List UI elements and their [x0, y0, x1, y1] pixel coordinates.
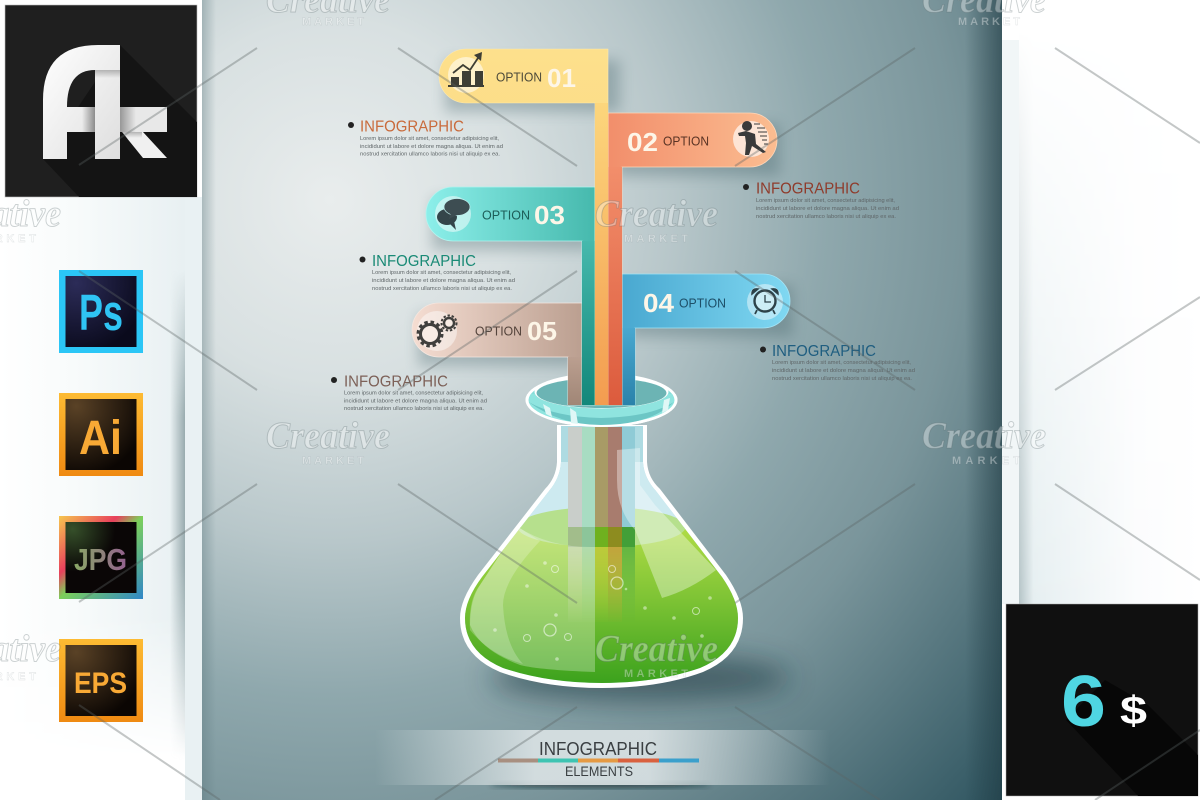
banner shadow — [490, 782, 710, 788]
option 02 label — [627, 121, 769, 157]
text block 04: incididunt ut labore et dolore magna aliqua. Ut enim ad — [772, 368, 915, 374]
stems in liquid — [568, 527, 635, 547]
format icon: Photoshop: Ps — [79, 284, 123, 341]
watermark logos: Creative — [266, 415, 390, 457]
watermark logos: MARKET — [624, 668, 688, 680]
option 02 label: OPTION — [663, 134, 709, 148]
glass highlight: right — [617, 448, 716, 598]
text block 02: nostrud xercitation ullamco laboris nisi ut aliquip ex ea. — [756, 214, 896, 220]
option 04 label — [643, 284, 783, 320]
banner subtitle: ELEMENTS — [565, 763, 633, 779]
AK logo mark — [43, 45, 167, 159]
watermark logos: MARKET — [624, 233, 688, 245]
option 01 ribbon — [439, 49, 608, 405]
banner colour bar — [498, 758, 699, 762]
option 01 label: 01 — [547, 63, 576, 93]
text block 02 — [743, 180, 899, 220]
logo box — [5, 5, 197, 197]
icon: alarm clock — [747, 284, 783, 320]
text block 04: nostrud xercitation ullamco laboris nisi ut aliquip ex ea. — [772, 376, 912, 382]
watermark logos: Creative — [595, 193, 718, 235]
glass outline — [460, 425, 743, 688]
icon: gears — [417, 311, 457, 351]
text block 05: INFOGRAPHIC — [344, 374, 448, 390]
format icon: EPS — [59, 639, 143, 722]
icon: rising chart — [448, 52, 484, 93]
glass highlight: left band — [470, 527, 540, 664]
stems fading in liquid — [568, 547, 635, 622]
watermark logos: MARKET — [958, 16, 1020, 28]
icon: runner — [733, 121, 769, 157]
text block 02: incididunt ut labore et dolore magna aliqua. Ut enim ad — [756, 206, 899, 212]
format icon: EPS: EPS — [74, 667, 127, 700]
text block 02: Lorem ipsum dolor sit amet, consectetur adipisicing elit, — [756, 198, 896, 204]
text block 05: Lorem ipsum dolor sit amet, consectetur adipisicing elit, — [344, 390, 484, 396]
option 03 label: OPTION — [482, 208, 530, 222]
watermark logos: Creative — [595, 628, 718, 670]
option 02 label: 02 — [627, 127, 658, 157]
flask body — [450, 425, 760, 690]
liquid — [465, 527, 738, 683]
text block 05: nostrud xercitation ullamco laboris nisi ut aliquip ex ea. — [344, 406, 484, 412]
bottom banner — [375, 730, 830, 788]
text block 01 — [348, 118, 503, 158]
price box — [1006, 604, 1198, 796]
text block 05: incididunt ut labore et dolore magna aliqua. Ut enim ad — [344, 398, 487, 404]
shoulder tint — [529, 462, 676, 518]
text block 01: INFOGRAPHIC — [360, 118, 464, 136]
option 05 label: OPTION — [475, 324, 522, 338]
right side panel — [1002, 40, 1116, 604]
option 01 label: OPTION — [496, 70, 542, 84]
tab shadows — [418, 60, 793, 366]
text block 03: INFOGRAPHIC — [372, 253, 476, 270]
stems in neck — [568, 427, 635, 527]
option 04 label: OPTION — [679, 296, 726, 310]
text block 04 — [760, 343, 915, 382]
option 03 ribbon — [426, 187, 595, 405]
text block 01: Lorem ipsum dolor sit amet, consectetur adipisicing elit, — [360, 136, 500, 142]
liquid surface — [518, 507, 686, 547]
flask rim back — [526, 373, 678, 427]
text block 03: Lorem ipsum dolor sit amet, consectetur adipisicing elit, — [372, 270, 512, 276]
watermark logos: MARKET — [302, 455, 364, 467]
flask drop shadow — [490, 654, 790, 702]
format icon: JPG — [59, 516, 143, 599]
glass interior — [465, 426, 738, 683]
left side panel — [82, 197, 202, 800]
small bubbles — [493, 561, 712, 661]
text block 03: incididunt ut labore et dolore magna aliqua. Ut enim ad — [372, 278, 515, 284]
text block 04: INFOGRAPHIC — [772, 343, 876, 360]
option 02 ribbon — [608, 113, 777, 405]
option 03 label — [435, 196, 565, 232]
text block 03 — [360, 253, 515, 292]
long shadow of logo — [43, 45, 197, 197]
option 05 ribbon — [412, 303, 582, 405]
price shadow — [1066, 680, 1198, 796]
price currency: $ — [1120, 689, 1147, 733]
watermark logos — [0, 0, 1046, 683]
format icon: Photoshop — [59, 270, 143, 353]
format icon: JPG: JPG — [74, 542, 127, 577]
icon: speech bubbles — [435, 196, 471, 232]
option 05 label: 05 — [527, 316, 557, 346]
watermark logos: MARKET — [302, 16, 364, 28]
text block 05 — [331, 374, 487, 412]
text block 03: nostrud xercitation ullamco laboris nisi ut aliquip ex ea. — [372, 286, 512, 292]
text block 04: Lorem ipsum dolor sit amet, consectetur adipisicing elit, — [772, 360, 912, 366]
text block 01: incididunt ut labore et dolore magna aliqua. Ut enim ad — [360, 144, 503, 150]
text block 01: nostrud xercitation ullamco laboris nisi ut aliquip ex ea. — [360, 152, 500, 158]
banner title: INFOGRAPHIC — [539, 738, 657, 759]
watermark logos: Creative — [922, 415, 1046, 457]
center background — [202, 0, 1002, 800]
flask rim front — [526, 394, 678, 427]
option 01 label — [448, 52, 576, 93]
price value: 6 — [1061, 662, 1106, 742]
text block 02: INFOGRAPHIC — [756, 180, 860, 198]
option 05 label — [417, 311, 557, 351]
option 04 ribbon — [622, 274, 790, 405]
glass highlight: left — [470, 527, 595, 672]
option 03 label: 03 — [534, 200, 565, 230]
watermark logos: MARKET — [952, 455, 1020, 467]
option 04 label: 04 — [643, 288, 675, 318]
bubbles — [524, 566, 700, 642]
format icon: Illustrator — [59, 393, 143, 476]
format icon: Illustrator: Ai — [79, 412, 122, 465]
